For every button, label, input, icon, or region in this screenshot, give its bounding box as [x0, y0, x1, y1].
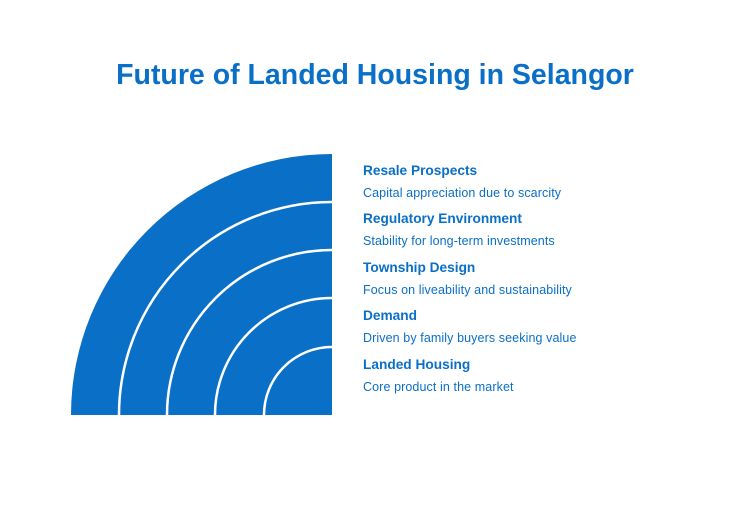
item: Landed Housing: Core product in the market	[363, 380, 514, 394]
item: Landed Housing	[363, 357, 514, 394]
title: Future of Landed Housing in Selangor	[116, 59, 634, 91]
item: Resale Prospects: Capital appreciation due to scarcity	[363, 186, 561, 200]
item: Regulatory Environment: Regulatory Environment	[363, 211, 522, 226]
item: Township Design	[363, 260, 572, 297]
item: Township Design: Township Design	[363, 260, 475, 275]
item: Regulatory Environment: Stability for long-term investments	[363, 234, 555, 248]
item: Resale Prospects	[363, 163, 561, 200]
item: Regulatory Environment	[363, 211, 555, 248]
item: Demand: Demand	[363, 308, 417, 323]
item: Township Design: Focus on liveability and sustainability	[363, 283, 572, 297]
item: Demand	[363, 308, 577, 345]
item: Resale Prospects: Resale Prospects	[363, 163, 477, 178]
item: Demand: Driven by family buyers seeking value	[363, 331, 577, 345]
item: Landed Housing: Landed Housing	[363, 357, 470, 372]
